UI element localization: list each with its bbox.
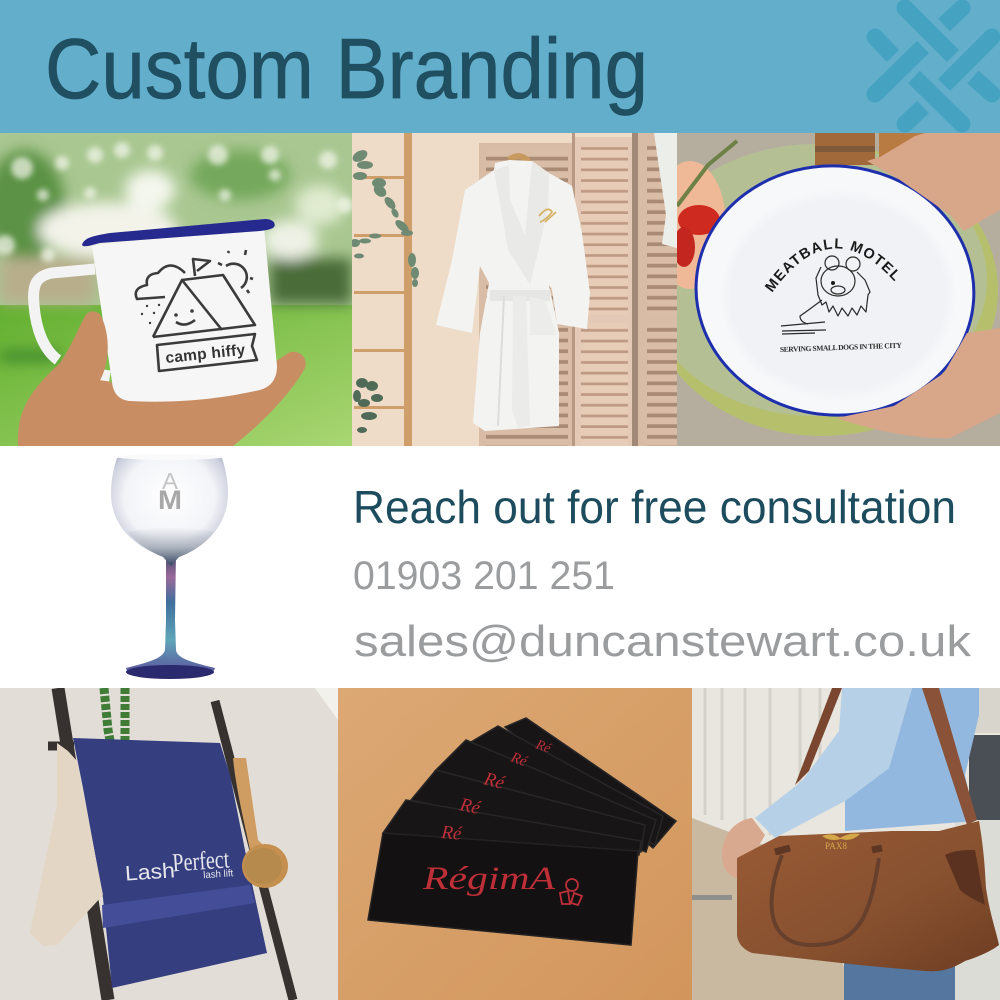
towel: [73, 738, 267, 988]
header banner: [0, 0, 1000, 133]
place mat: [677, 150, 998, 436]
title: Custom Branding: [45, 22, 648, 117]
plate: [694, 164, 976, 417]
consultation heading: Reach out for free consultation: [353, 481, 956, 533]
dog illustration: [781, 256, 870, 334]
white towel edge: [654, 133, 677, 248]
grapefruit and tomatoes: [677, 161, 725, 289]
left strap: [795, 688, 842, 785]
phone: 01903 201 251: [353, 554, 615, 598]
glass monogram: M: [158, 485, 182, 515]
mug rim: [82, 219, 275, 246]
towel embroidery: Ré: [440, 822, 464, 845]
hands: [867, 133, 1000, 231]
towel embroidery: Ré: [481, 768, 508, 794]
pavement: [692, 818, 860, 1000]
shutter doors: [479, 143, 572, 446]
robe monogram: [539, 209, 556, 222]
photo: iridescent gin glass: [111, 454, 228, 679]
photo: blue towel on ladder: [0, 688, 338, 1000]
wooden jars: [815, 133, 875, 165]
sleeve: [755, 688, 912, 838]
jeans: [844, 960, 955, 1000]
wooden brush: [233, 758, 262, 850]
photo: enamel mug held in hand: [0, 133, 353, 446]
cream cloth: [30, 743, 103, 946]
hand palm and fingers: [18, 352, 306, 446]
towel brand: Lash: [124, 859, 176, 886]
towel embroidery: RégimA: [422, 861, 556, 897]
towel embroidery: Ré: [508, 749, 530, 771]
columns: [705, 688, 820, 835]
contact text: [353, 481, 972, 666]
towel brand: [126, 850, 234, 880]
plate print: [772, 248, 904, 293]
plate tagline: SERVING SMALL DOGS IN THE CITY: [780, 341, 903, 354]
glass monogram: [158, 468, 182, 515]
glass monogram: A: [162, 468, 179, 494]
photo: white bathrobe: [350, 133, 677, 446]
icon: woven logo: [866, 0, 1000, 132]
right strap: [922, 688, 977, 825]
mug print: [136, 250, 257, 371]
towel embroidery: Ré: [457, 794, 483, 819]
email: sales@duncanstewart.co.uk: [354, 617, 972, 666]
towel stack: [383, 718, 676, 855]
hanging plant: [104, 688, 125, 756]
thumb: [60, 311, 108, 380]
mug handle: [34, 269, 110, 376]
photo: enamel plate held in hands: [677, 133, 1000, 446]
photo: black embroidered towels: [338, 688, 692, 1000]
towel embroidery: [422, 737, 556, 897]
bag emblem: PAX8: [825, 841, 848, 851]
ladder: [354, 133, 412, 446]
torso shirt: [845, 688, 979, 831]
leaves: [350, 148, 419, 433]
photo: leather holdall bag: [692, 688, 1000, 1000]
hand: [722, 818, 765, 878]
robe: [436, 160, 590, 431]
bag emblem: [822, 834, 860, 851]
bag: [737, 821, 999, 971]
towel brand: lash lift: [203, 868, 234, 881]
mug label: camp hiffy: [165, 342, 246, 367]
hanger: [507, 153, 532, 161]
towel embroidery: Ré: [533, 737, 553, 757]
mug body: [92, 226, 277, 402]
glass stem and foot: [126, 552, 215, 678]
bag handles: [772, 855, 879, 945]
ladder rails: [58, 688, 108, 1000]
front towel: [368, 833, 638, 945]
icon: embroidered bells: [560, 879, 582, 905]
towel brand: Perfect: [171, 844, 231, 877]
photo: enamel plate held in hands: MEATBALL MOTEL: [764, 238, 898, 292]
railing: [969, 735, 1000, 821]
glass bowl: [111, 455, 228, 565]
